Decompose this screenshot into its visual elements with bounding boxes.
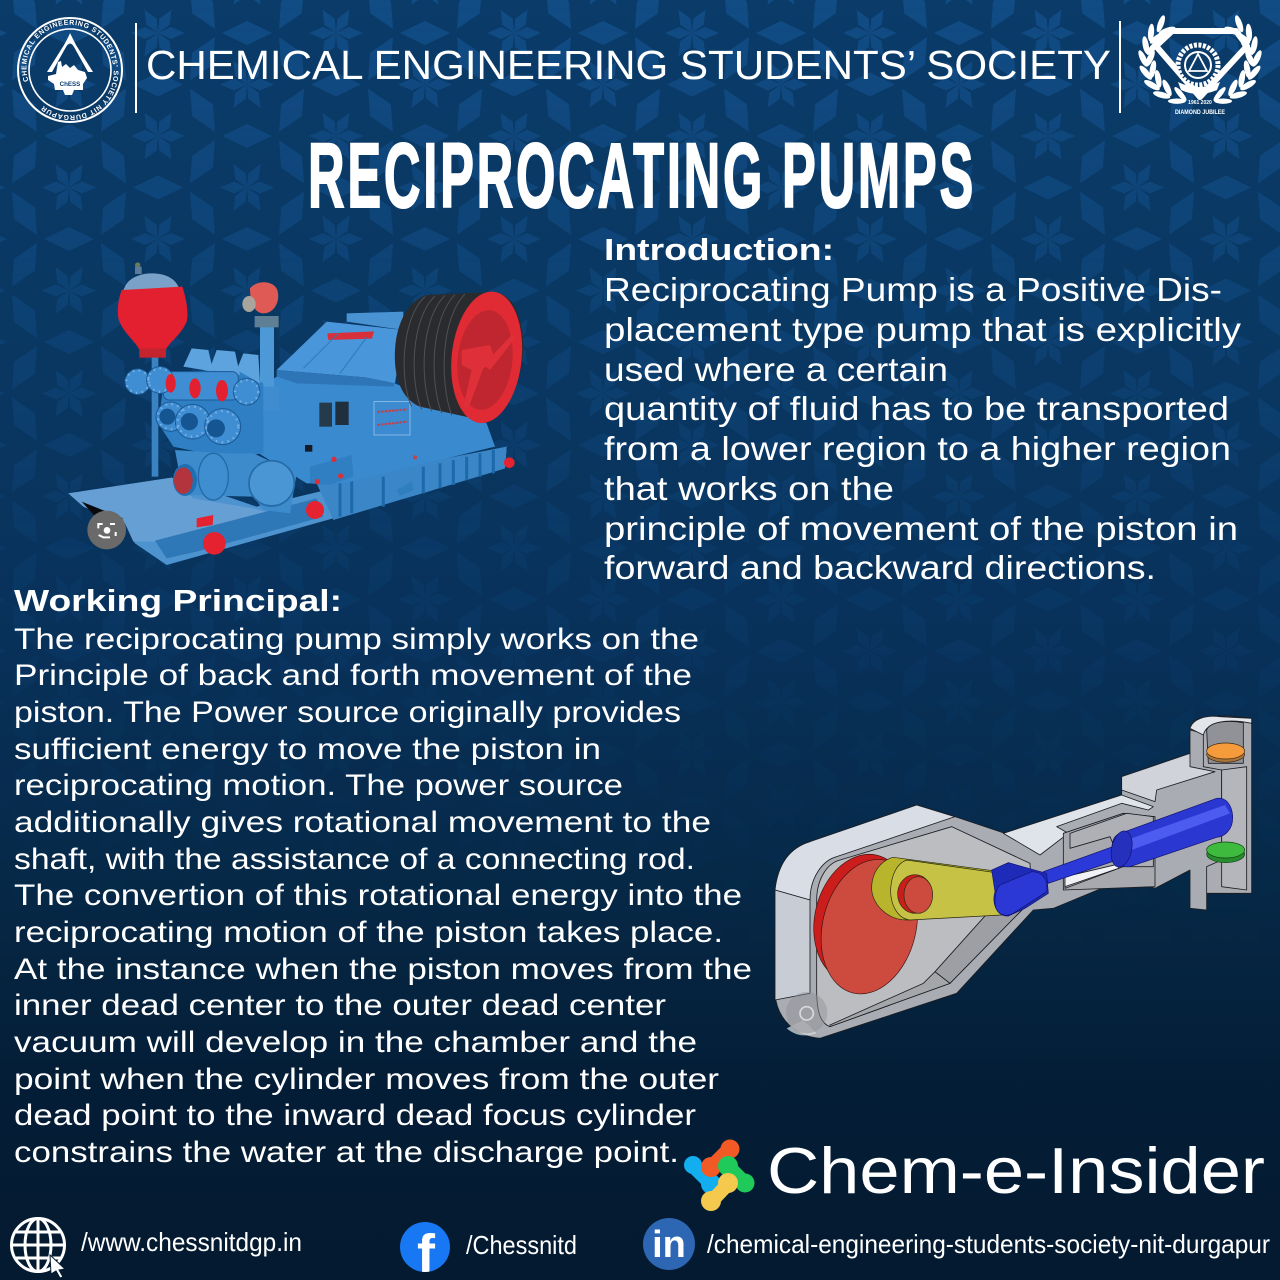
introduction body bbox=[604, 271, 1242, 586]
red crank disc bbox=[801, 844, 931, 1004]
working principal body: additionally gives rotational movement to the bbox=[14, 806, 711, 839]
green suction valve bbox=[1207, 842, 1245, 863]
footer: website link bbox=[12, 1218, 302, 1278]
suction pipe bbox=[173, 450, 297, 513]
orange discharge valve bbox=[1207, 743, 1245, 762]
image lens badge bbox=[786, 992, 827, 1035]
logo: Chem-e-Insider molecule bbox=[684, 1140, 754, 1211]
working principal body: inner dead center to the outer dead center bbox=[14, 989, 666, 1022]
working principal body: sufficient energy to move the piston in bbox=[14, 733, 601, 766]
pump body bbox=[253, 312, 495, 496]
introduction body: quantity of fluid has to be transported bbox=[604, 390, 1229, 427]
introduction body: used where a certain bbox=[604, 351, 948, 388]
introduction body: that works on the bbox=[604, 470, 894, 507]
working principal body: Principle of back and forth movement of the bbox=[14, 659, 692, 692]
introduction body: Reciprocating Pump is a Positive Dis- bbox=[604, 271, 1222, 308]
working principal body: vacuum will develop in the chamber and the bbox=[14, 1026, 697, 1059]
logo: ChESS society seal: CHEMICAL ENGINEERING STUDENTS' SOCIETY NIT DURGAPUR bbox=[22, 20, 118, 120]
working principal body: point when the cylinder moves from the outer bbox=[14, 1063, 719, 1096]
brand name: Chem-e-Insider: Chem-e-Insider bbox=[767, 1134, 1265, 1207]
divider: left header rule bbox=[135, 23, 137, 113]
working principal body: reciprocating motion of the piston takes place. bbox=[14, 916, 723, 949]
introduction body: from a lower region to a higher region bbox=[604, 430, 1231, 467]
working principal body: piston. The Power source originally provides bbox=[14, 696, 681, 729]
logo: diamond jubilee emblem: DIAMOND JUBILEE bbox=[1175, 110, 1225, 116]
logo: diamond jubilee emblem bbox=[1137, 14, 1263, 116]
working principal body bbox=[14, 623, 752, 1169]
working principal heading: Working Principal: bbox=[14, 583, 342, 618]
logo: diamond jubilee emblem: 1961 2020 bbox=[1188, 100, 1212, 106]
facebook text: /Chessnitd bbox=[466, 1230, 577, 1260]
introduction heading: Introduction: bbox=[604, 232, 834, 267]
fluid end manifold bbox=[125, 348, 263, 458]
working principal body: dead point to the inward dead focus cylinder bbox=[14, 1099, 696, 1132]
air vessel bbox=[118, 262, 187, 477]
text block: introduction bbox=[604, 232, 1242, 586]
divider: right header rule bbox=[1119, 21, 1121, 113]
working principal body: At the instance when the piston moves from the bbox=[14, 953, 752, 986]
icon: globe bbox=[12, 1218, 65, 1278]
working principal body: The convertion of this rotational energy into the bbox=[14, 879, 742, 912]
icon: facebook bbox=[400, 1222, 450, 1272]
footer: linkedin link bbox=[643, 1218, 1270, 1270]
working principal body: reciprocating motion. The power source bbox=[14, 769, 623, 802]
heading: society name: CHEMICAL ENGINEERING STUDENTS’ SOCIETY bbox=[146, 42, 1111, 88]
blue piston and rod bbox=[1043, 798, 1233, 883]
yellow connecting rod bbox=[872, 857, 1003, 920]
introduction body: principle of movement of the piston in bbox=[604, 510, 1238, 547]
discharge gauge pipe bbox=[242, 282, 279, 411]
illustration: piston and crank cutaway bbox=[775, 716, 1252, 1038]
working principal body: constrains the water at the discharge point. bbox=[14, 1136, 679, 1169]
red plugs bbox=[197, 457, 515, 555]
introduction body: placement type pump that is explicitly bbox=[604, 311, 1242, 348]
icon: linkedin: in bbox=[652, 1224, 686, 1266]
pump base plate bbox=[68, 447, 507, 565]
housing outer shell bbox=[775, 716, 1252, 1038]
blue rod end bbox=[992, 863, 1048, 916]
footer: facebook link bbox=[400, 1222, 576, 1272]
pulley wheel bbox=[395, 288, 528, 427]
icon: linkedin bbox=[643, 1218, 695, 1270]
illustration: reciprocating pump photo bbox=[68, 262, 528, 565]
logo: ChESS society seal: ChESS bbox=[60, 81, 80, 88]
text block: working principal bbox=[14, 583, 752, 1169]
working principal body: The reciprocating pump simply works on the bbox=[14, 623, 699, 656]
introduction body: forward and backward directions. bbox=[604, 549, 1156, 586]
working principal body: shaft, with the assistance of a connecting rod. bbox=[14, 843, 695, 876]
website text: /www.chessnitdgp.in bbox=[81, 1227, 302, 1257]
image lens badge bbox=[82, 502, 126, 549]
